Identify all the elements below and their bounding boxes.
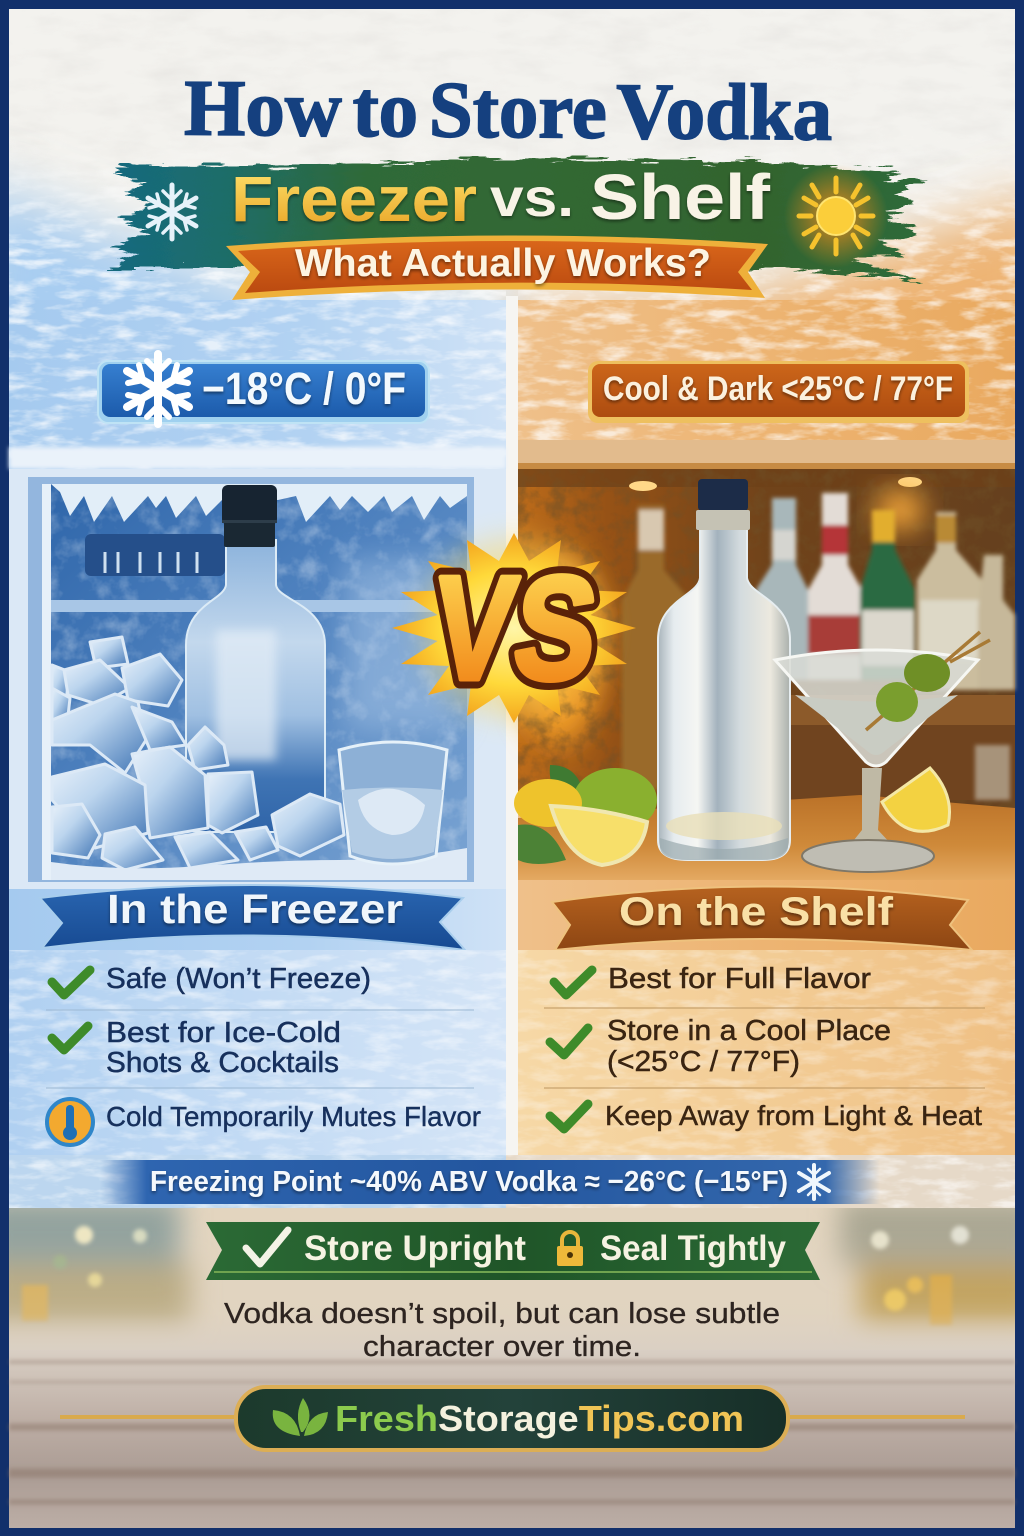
badge: shelf temperature bbox=[588, 361, 969, 423]
frozen package bbox=[85, 534, 225, 576]
item: mutes flavor: Cold Temporarily Mutes Flavor bbox=[106, 1101, 481, 1132]
item: mutes flavor bbox=[47, 1099, 481, 1145]
band: freezing point bbox=[100, 1160, 880, 1204]
item: cool place: (<25°C / 77°F) bbox=[607, 1046, 800, 1078]
icon: leaves bbox=[273, 1398, 328, 1436]
background: wood counter bbox=[9, 1350, 1015, 1528]
item: cool place: Store in a Cool Place bbox=[607, 1015, 891, 1047]
ribbon: store upright, seal tightly: Store Upright bbox=[304, 1229, 526, 1268]
bottle bbox=[658, 479, 790, 860]
counter bbox=[518, 795, 1015, 880]
panel: freezer scene bbox=[9, 447, 506, 889]
icon: sun bbox=[799, 178, 873, 254]
icicles bbox=[51, 484, 467, 522]
badge: shelf temperature: Cool & Dark <25°C / 77°F bbox=[603, 370, 953, 408]
orange ribbon subtitle: What Actually Works? bbox=[295, 242, 711, 285]
title: How to Store Vodka bbox=[184, 64, 833, 158]
closing note: Vodka doesn’t spoil, but can lose subtle bbox=[224, 1298, 780, 1330]
banner heading: Freezer bbox=[231, 163, 477, 235]
item: ice cold bbox=[52, 1017, 341, 1079]
icon: check bbox=[246, 1230, 288, 1264]
icon: sun glow bbox=[784, 164, 888, 268]
item: ice cold: Shots & Cocktails bbox=[106, 1047, 339, 1079]
background bottles bbox=[622, 493, 1015, 790]
ribbon: in the freezer: In the Freezer bbox=[107, 886, 403, 932]
ribbon: on the shelf: On the Shelf bbox=[619, 890, 894, 934]
item: light and heat: Keep Away from Light & Heat bbox=[605, 1100, 982, 1131]
website pill bbox=[60, 1387, 965, 1450]
badge: freezer temperature: −18°C / 0°F bbox=[202, 363, 406, 414]
icon: padlock bbox=[557, 1232, 583, 1266]
item: full flavor: Best for Full Flavor bbox=[608, 963, 871, 995]
icon: snowflake bbox=[148, 185, 196, 239]
VS starburst: VS bbox=[426, 546, 605, 711]
background: band base bbox=[9, 1155, 1015, 1215]
glass bbox=[339, 742, 447, 864]
band: freezing point: Freezing Point ~40% ABV Vodka ≈ −26°C (−15°F) bbox=[150, 1166, 788, 1198]
ribbon: store upright, seal tightly: Seal Tightly bbox=[600, 1229, 786, 1268]
item: cool place bbox=[550, 1015, 891, 1078]
panel: freezer background bbox=[9, 300, 506, 1160]
item: ice cold: Best for Ice-Cold bbox=[106, 1017, 341, 1049]
closing note bbox=[224, 1298, 780, 1363]
frost mottling bbox=[51, 484, 467, 880]
panel: bar shelf scene bbox=[514, 440, 1015, 880]
VS starburst: VS bbox=[426, 546, 605, 711]
banner heading: Shelf bbox=[590, 161, 771, 233]
background: bottom bokeh bbox=[0, 1200, 1024, 1358]
banner heading: vs. bbox=[490, 168, 574, 228]
item: safe: Safe (Won’t Freeze) bbox=[106, 963, 371, 995]
icon: snowflake bbox=[799, 1165, 829, 1199]
snow drift bbox=[51, 848, 467, 880]
banner heading bbox=[231, 161, 771, 235]
snow texture bbox=[9, 184, 1015, 469]
center divider bbox=[506, 296, 518, 1156]
icon: snowflake bbox=[127, 354, 189, 424]
ribbon: store upright, seal tightly bbox=[206, 1222, 820, 1280]
lemons and limes bbox=[514, 765, 950, 865]
panel: shelf background bbox=[518, 300, 1015, 1160]
martini glass bbox=[775, 632, 990, 872]
badge: freezer temperature bbox=[98, 354, 429, 424]
website pill: FreshStorageTips.com bbox=[335, 1398, 744, 1439]
ribbon: on the shelf bbox=[552, 886, 972, 950]
green banner bbox=[104, 158, 926, 280]
ribbon: in the freezer bbox=[40, 885, 465, 950]
closing note: character over time. bbox=[363, 1331, 641, 1363]
orange ribbon subtitle bbox=[226, 235, 768, 300]
bottle bbox=[186, 485, 325, 832]
list: shelf bbox=[518, 950, 1015, 1160]
list: freezer bbox=[9, 950, 506, 1160]
ice cubes bbox=[52, 637, 344, 870]
